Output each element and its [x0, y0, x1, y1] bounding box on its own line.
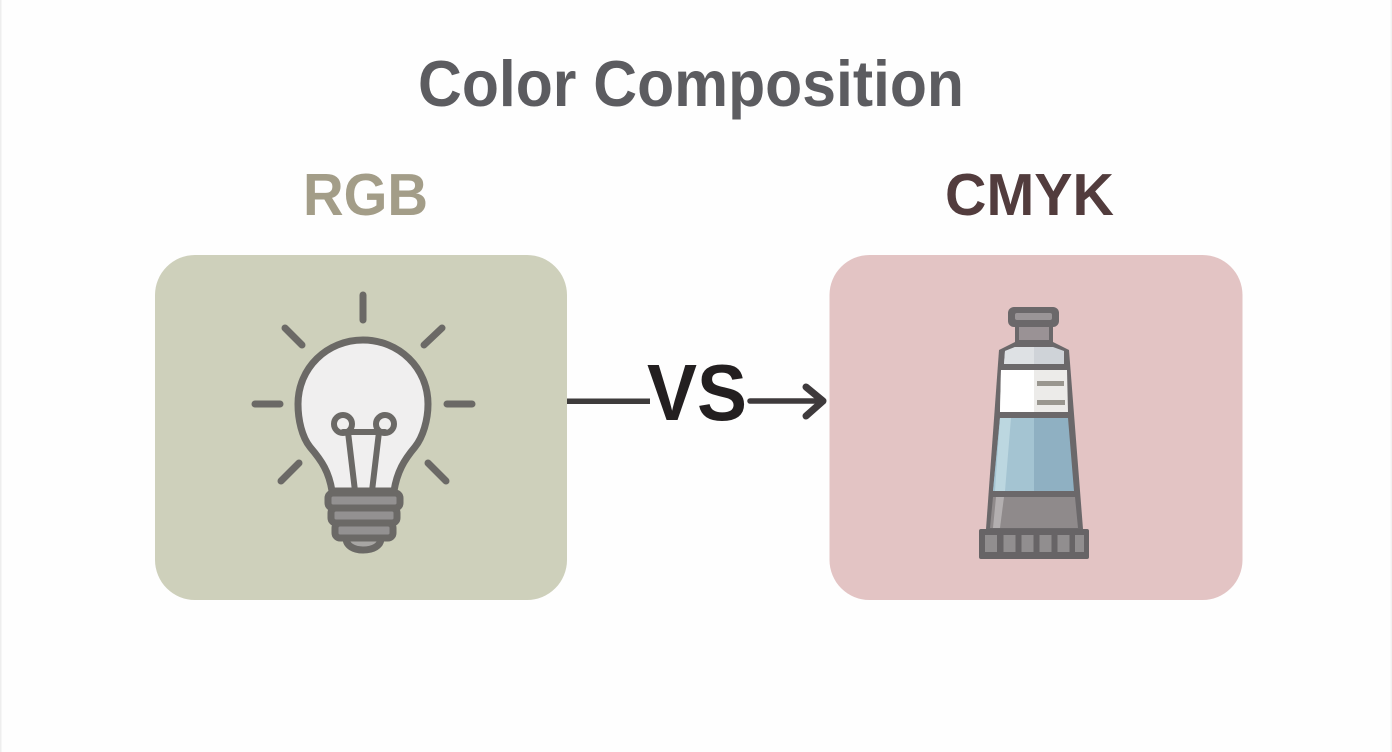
- tube crimp end: [979, 529, 1089, 559]
- bulb filament: [334, 415, 394, 491]
- label lines: [1037, 381, 1064, 386]
- tube blue section: [993, 418, 1074, 491]
- tube shoulder section: [1004, 347, 1064, 364]
- tube body: [986, 342, 1083, 529]
- heading: CMYK: CMYK: [945, 162, 1114, 228]
- icon: paint tube: [979, 307, 1089, 559]
- bulb screw base: [328, 493, 400, 550]
- heading: RGB: RGB: [303, 162, 428, 228]
- tube neck: [1015, 324, 1053, 344]
- panel: CMYK: [830, 255, 1242, 600]
- tube grey section: [990, 497, 1078, 528]
- VS label: VS: [647, 348, 747, 437]
- arrow: [750, 387, 823, 416]
- bulb rays: [255, 295, 472, 481]
- bulb glass: [298, 340, 428, 491]
- connector line: [567, 398, 650, 404]
- title: Color Composition: [418, 47, 964, 120]
- tube cap: [1008, 307, 1059, 327]
- tube label section: [1000, 370, 1068, 412]
- icon: light bulb: [255, 295, 472, 550]
- panel: RGB: [155, 255, 567, 600]
